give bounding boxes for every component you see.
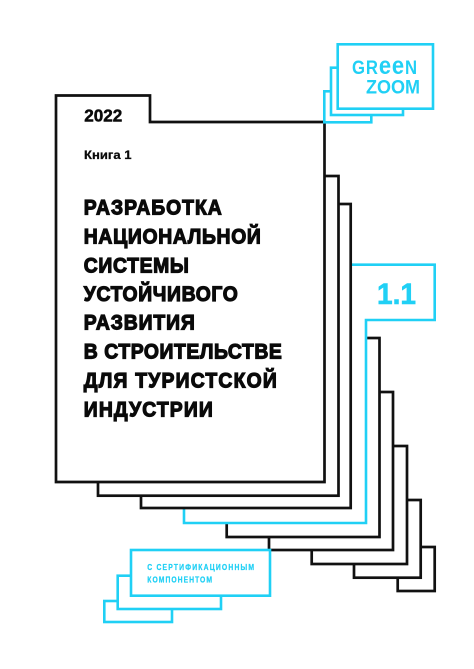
title: НАЦИОНАЛЬНОЙ (84, 223, 261, 249)
logo: Green Zoom (324, 44, 433, 122)
title: В СТРОИТЕЛЬСТВЕ (84, 339, 282, 364)
book number: Книга 1 (84, 148, 132, 162)
title: РАЗВИТИЯ (84, 311, 195, 335)
title: ИНДУСТРИИ (84, 398, 213, 422)
title (84, 195, 282, 422)
title: УСТОЙЧИВОГО (84, 281, 238, 306)
logo: Green Zoom: ZOOM (366, 77, 420, 98)
logo: Green Zoom: GReeN (352, 52, 418, 80)
callout: certification component (104, 550, 270, 622)
title: ДЛЯ ТУРИСТСКОЙ (84, 368, 277, 393)
callout: certification component: С СЕРТИФИКАЦИОННЫМ (147, 562, 254, 572)
title: РАЗРАБОТКА (84, 195, 222, 220)
stacked pages behind the cover (98, 176, 435, 591)
volume number tag: 1.1 (377, 278, 416, 311)
title: СИСТЕМЫ (84, 253, 189, 278)
cover page (56, 96, 324, 482)
callout: certification component: КОМПОНЕНТОМ (147, 575, 212, 585)
year: 2022 (84, 106, 123, 126)
